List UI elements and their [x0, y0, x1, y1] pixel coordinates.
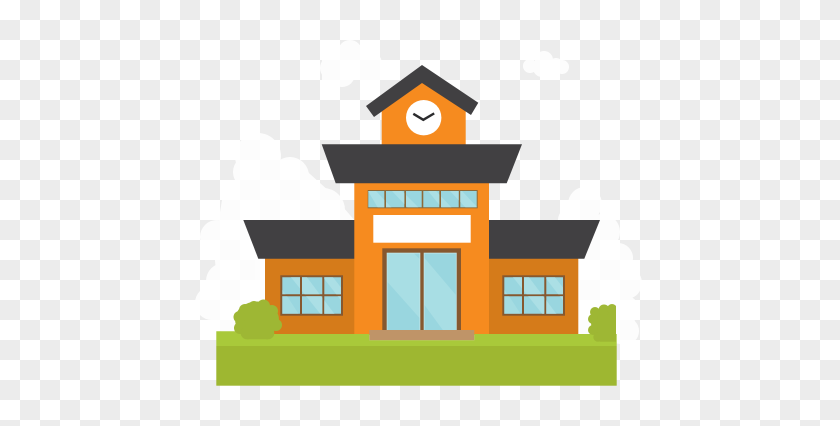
left wing roof — [243, 220, 355, 259]
right wing roof — [489, 220, 600, 259]
sign board — [373, 215, 471, 243]
central block — [322, 144, 522, 340]
cloud: top left — [320, 40, 382, 87]
cloud: top right — [523, 51, 569, 77]
right wing — [489, 220, 600, 334]
cloud: left large — [195, 133, 356, 335]
clouds: pale white shapes behind building — [195, 40, 642, 345]
icon: clock — [406, 100, 441, 135]
door left panel — [387, 253, 420, 330]
main roof — [322, 144, 522, 183]
left wing wall — [265, 258, 355, 334]
upper window strip — [367, 190, 478, 209]
bush: right, cut off at lawn edge — [588, 304, 616, 342]
tower roof — [366, 65, 478, 117]
lawn front — [216, 346, 617, 386]
door right panel — [424, 253, 457, 330]
entrance door — [382, 248, 461, 330]
central wall — [354, 183, 489, 335]
tower wall — [382, 80, 466, 144]
lawn — [216, 331, 617, 386]
bush: left — [234, 300, 282, 339]
clock tower — [366, 65, 478, 144]
left wing window — [280, 275, 343, 316]
right wing window — [502, 275, 565, 316]
left wing — [243, 220, 355, 334]
right wing wall — [489, 258, 578, 334]
cloud: right large — [558, 187, 642, 345]
entrance step — [369, 330, 474, 340]
lawn top strip — [216, 331, 617, 346]
